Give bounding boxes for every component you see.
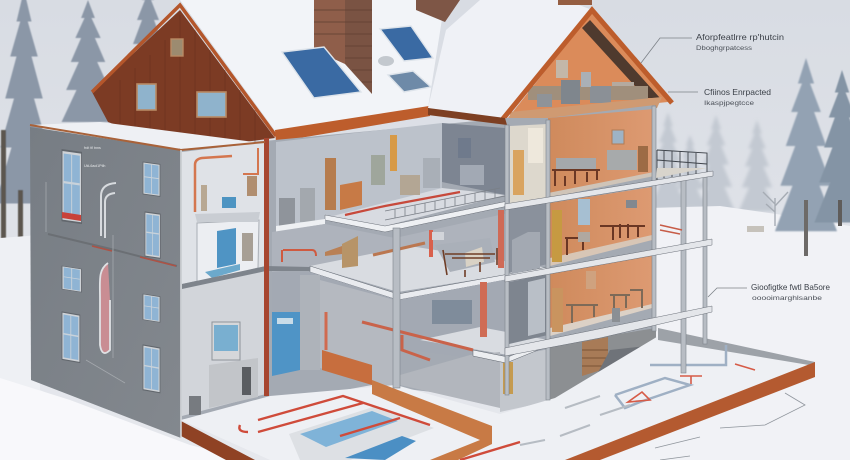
left room: upper (182, 142, 266, 284)
chimney back (416, 0, 460, 22)
wall small annotation: frdt tfl tnns (84, 146, 101, 150)
center rooms background (180, 105, 655, 420)
callout: eave (668, 88, 771, 107)
right room floor 1: dining (510, 109, 654, 204)
roof eave (275, 106, 430, 142)
callout: roof: Dboghgrpatcess (696, 45, 753, 52)
attic clutter (528, 60, 648, 107)
upper center room (276, 123, 505, 228)
callout: ground floor: Gioofigtke fwtl Ba5ore (751, 283, 830, 292)
snow bank lower left (0, 378, 250, 460)
callout: eave: Cfiinos Enrpacted (704, 88, 771, 97)
middle center room (272, 205, 548, 292)
callout: roof: Aforpfeatlrre rp'hutcin (696, 33, 784, 42)
callout: eave: Ikaspjpegtcce (704, 100, 754, 107)
attic gable (508, 12, 668, 118)
upper slab (325, 201, 508, 232)
right room floor 3: lounge (505, 255, 652, 345)
wall red beam section (92, 246, 176, 266)
attic dark rafter (582, 20, 660, 98)
upper balcony railing (385, 188, 505, 220)
gable wood boards (120, 15, 255, 150)
ground slab (181, 335, 815, 460)
roof slab trim (30, 125, 265, 150)
foundation edge left (179, 420, 255, 460)
right room floor 2: dining (505, 187, 652, 274)
pale plan marks on slab (520, 396, 630, 445)
wall annotation text: UkL6aol1Ptlh (84, 164, 105, 168)
right roof snow (428, 0, 592, 118)
gable end wall, wood (92, 10, 275, 150)
left room: lower (182, 268, 266, 416)
gable trim (92, 5, 276, 136)
orange footing (372, 380, 492, 460)
wall pipes upper (101, 183, 116, 238)
wall beam (48, 234, 177, 266)
wall conduit (46, 182, 125, 383)
right roof underside trim (428, 108, 507, 125)
chimney left (314, 0, 372, 94)
top chimney (558, 0, 592, 5)
solar panels (282, 26, 530, 98)
left house wall (30, 127, 181, 438)
callout: roof (641, 33, 784, 63)
balcony floor (656, 168, 707, 178)
snow dimension line (655, 393, 805, 460)
middle slab (310, 266, 548, 300)
outdoor pipe (660, 225, 682, 234)
lower slab (473, 340, 548, 363)
structure columns (393, 106, 707, 400)
snow ground left (0, 235, 200, 460)
background: distant right trees (650, 112, 775, 213)
callout: ground floor (708, 283, 830, 302)
foundation side snow line (180, 150, 182, 438)
back wall parapet (658, 328, 815, 366)
radiant loop on slab (615, 345, 726, 408)
snow ground right (500, 206, 850, 460)
heating pool (289, 406, 434, 460)
foundation edge right (565, 362, 815, 460)
roof slab snow (30, 122, 262, 149)
attic floor band (510, 97, 662, 122)
red markers on slab (628, 364, 755, 402)
background: right pine trees (747, 58, 850, 256)
orange gable trim (502, 10, 672, 120)
callout: ground floor: ooooimarghlsanbe (752, 295, 822, 302)
wall pipes lower (100, 263, 110, 353)
balcony slabs on right (505, 171, 713, 356)
basement room (550, 328, 656, 400)
lower center room (272, 272, 555, 412)
background: left forest (0, 0, 171, 248)
balcony railing (657, 150, 707, 180)
floor heating red pipes (239, 396, 520, 460)
central red riser (264, 138, 269, 396)
gable windows (137, 39, 226, 117)
wall windows (62, 150, 160, 393)
gable roof snow (180, 0, 445, 132)
